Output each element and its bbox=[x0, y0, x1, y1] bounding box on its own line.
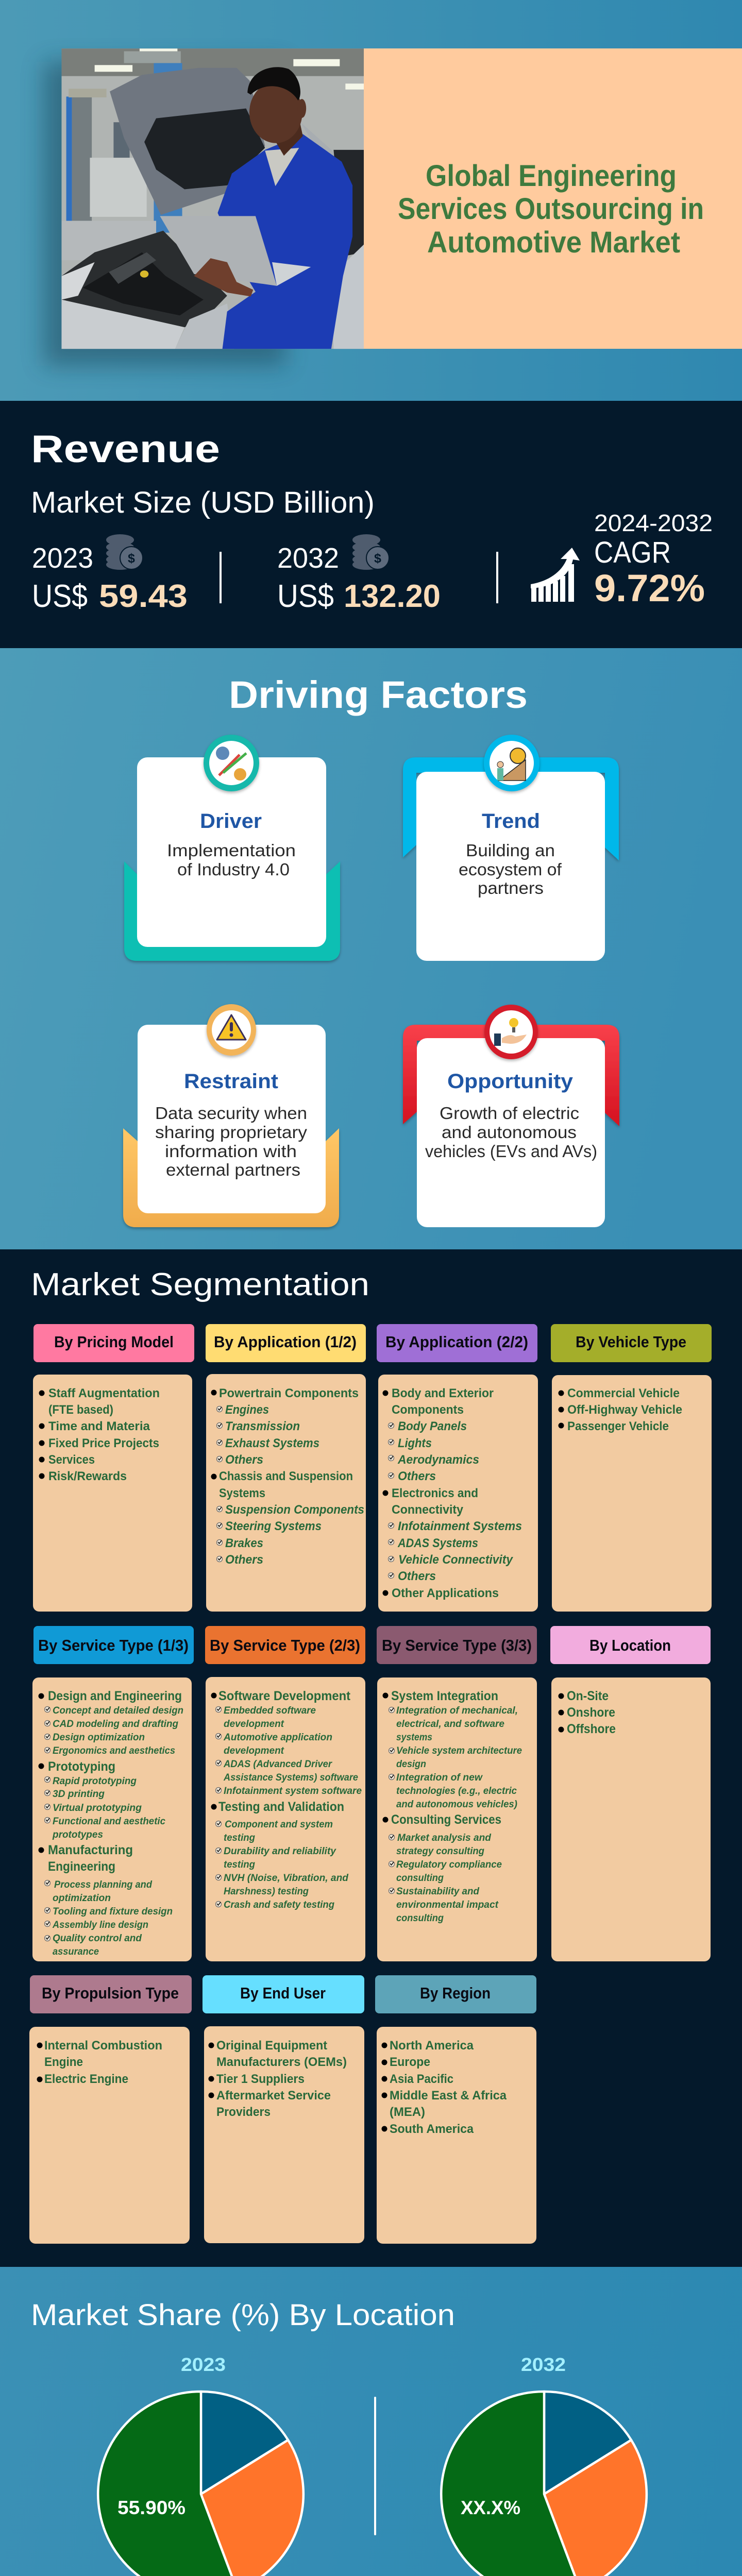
region list: South America bbox=[390, 2122, 474, 2136]
pricing model list bbox=[39, 1386, 160, 1483]
panel: by vehicle type bbox=[551, 1324, 712, 1612]
trend text bbox=[459, 841, 562, 897]
revenue 2023: 59.43 bbox=[99, 579, 188, 614]
service type 1 list: assurance bbox=[53, 1946, 99, 1957]
application 2 list: Electronics and bbox=[392, 1486, 478, 1500]
pie chart: location 2032 bbox=[441, 2392, 647, 2576]
application 1 list: Transmission bbox=[225, 1419, 300, 1433]
icon: coins 2023: $ bbox=[128, 551, 135, 566]
application 1 list: Systems bbox=[219, 1486, 265, 1500]
icon: coins 2032: $ bbox=[374, 551, 381, 566]
vehicle type list: Off-Highway Vehicle bbox=[567, 1403, 682, 1417]
service type 2 list: Software Development bbox=[218, 1689, 351, 1703]
panel: by service type 1/3: By Service Type (1/3) bbox=[38, 1636, 189, 1654]
title text: Automotive Market bbox=[427, 226, 680, 259]
trend heading: Trend bbox=[482, 810, 540, 833]
service type 2 list bbox=[211, 1689, 362, 1910]
pie chart: location 2023 bbox=[98, 2392, 303, 2576]
service type 3 list: Integration of mechanical, bbox=[396, 1705, 518, 1716]
panel: by propulsion type: By Propulsion Type bbox=[42, 1984, 179, 2002]
propulsion list: Internal Combustion bbox=[44, 2039, 162, 2053]
service type 2 list: testing bbox=[224, 1833, 255, 1843]
hero photo: mechanic with laptop bbox=[61, 48, 364, 349]
service type 1 list: 3D printing bbox=[53, 1789, 105, 1800]
restraint text bbox=[155, 1104, 308, 1179]
region list bbox=[381, 2039, 507, 2136]
application 2 list: Components bbox=[392, 1403, 464, 1417]
service type 2 list: Component and system bbox=[225, 1819, 333, 1830]
divider bbox=[220, 552, 222, 603]
revenue 2032: US$ bbox=[277, 579, 334, 614]
panel: by service type 2/3 bbox=[205, 1626, 365, 1961]
market segmentation heading: Market Segmentation bbox=[31, 1267, 369, 1302]
panel: by service type 3/3 bbox=[377, 1626, 537, 1961]
region list: Asia Pacific bbox=[390, 2072, 453, 2086]
service type 2 list: testing bbox=[224, 1859, 255, 1870]
end user list: Providers bbox=[216, 2105, 271, 2119]
application 2 list: Others bbox=[398, 1569, 436, 1583]
panel: by service type 3/3: By Service Type (3/3) bbox=[382, 1636, 532, 1654]
end user list: Manufacturers (OEMs) bbox=[216, 2055, 347, 2069]
restraint text: Data security when bbox=[155, 1104, 307, 1123]
service type 3 list: strategy consulting bbox=[396, 1846, 484, 1857]
panel: by pricing model: By Pricing Model bbox=[54, 1333, 174, 1351]
icon: warning triangle bbox=[207, 1004, 256, 1056]
icon: driver arrows and gears bbox=[204, 735, 259, 791]
pie chart: location 2023: 55.90% bbox=[117, 2497, 185, 2518]
service type 3 list: Vehicle system architecture bbox=[396, 1745, 522, 1756]
pie chart: location 2032: XX.X% bbox=[461, 2497, 520, 2518]
service type 2 list: Embedded software bbox=[224, 1705, 316, 1716]
application 2 list: Aerodynamics bbox=[397, 1453, 479, 1467]
vehicle type list: Commercial Vehicle bbox=[567, 1386, 680, 1400]
pricing model list: Staff Augmentation bbox=[48, 1386, 160, 1400]
service type 2 list: development bbox=[224, 1745, 284, 1756]
CAGR block: 9.72% bbox=[594, 567, 705, 609]
revenue 2023: 2023 bbox=[32, 542, 93, 574]
application 2 list: Infotainment Systems bbox=[398, 1519, 522, 1533]
location list: Onshore bbox=[567, 1705, 615, 1720]
pricing model list: Risk/Rewards bbox=[48, 1469, 127, 1483]
panel: by propulsion type bbox=[29, 1975, 192, 2244]
year label 2023: 2023 bbox=[181, 2354, 226, 2375]
icon: trend climber and gear bbox=[484, 735, 539, 791]
panel: by region: By Region bbox=[420, 1984, 491, 2002]
end user list: Tier 1 Suppliers bbox=[216, 2072, 305, 2086]
service type 1 list: Rapid prototyping bbox=[53, 1776, 137, 1787]
restraint text: sharing proprietary bbox=[155, 1123, 308, 1142]
service type 3 list: consulting bbox=[396, 1913, 444, 1924]
service type 1 list: Virtual prototyping bbox=[53, 1803, 142, 1814]
market share by location heading: Market Share (%) By Location bbox=[31, 2298, 455, 2332]
application 1 list bbox=[211, 1386, 364, 1567]
panel: driver bbox=[124, 735, 340, 961]
trend text: Building an bbox=[466, 841, 555, 860]
panel: opportunity bbox=[403, 1005, 619, 1227]
pricing model list: Services bbox=[48, 1453, 95, 1467]
panel: by application 2/2 bbox=[377, 1324, 538, 1612]
service type 1 list bbox=[38, 1689, 183, 1957]
revenue 2023 bbox=[32, 542, 188, 614]
divider bbox=[374, 2397, 376, 2535]
service type 2 list: Crash and safety testing bbox=[224, 1900, 334, 1910]
application 1 list: Suspension Components bbox=[225, 1503, 364, 1517]
location list: Offshore bbox=[567, 1722, 616, 1736]
service type 1 list: Concept and detailed design bbox=[53, 1705, 183, 1716]
service type 1 list: Quality control and bbox=[53, 1933, 142, 1944]
service type 1 list: Design and Engineering bbox=[48, 1689, 182, 1703]
application 1 list: Brakes bbox=[225, 1536, 263, 1550]
panel: by end user: By End User bbox=[240, 1984, 326, 2002]
panel: by pricing model bbox=[33, 1324, 194, 1612]
opportunity text: Growth of electric bbox=[440, 1104, 579, 1123]
service type 3 list: Consulting Services bbox=[391, 1812, 501, 1827]
title text: Global Engineering bbox=[426, 159, 677, 193]
restraint text: information with bbox=[165, 1142, 297, 1161]
service type 1 list: CAD modeling and drafting bbox=[53, 1719, 178, 1730]
service type 2 list: ADAS (Advanced Driver bbox=[223, 1759, 333, 1770]
CAGR block: CAGR bbox=[594, 536, 671, 569]
service type 3 list: System Integration bbox=[391, 1689, 498, 1703]
year label 2032: 2032 bbox=[521, 2354, 566, 2375]
service type 2 list: Assistance Systems) software bbox=[223, 1772, 358, 1783]
propulsion list: Engine bbox=[44, 2055, 83, 2069]
service type 3 list: Sustainability and bbox=[396, 1886, 479, 1897]
pricing model list: Time and Materia bbox=[48, 1419, 150, 1433]
panel: by service type 2/3: By Service Type (2/3) bbox=[210, 1636, 360, 1654]
location list bbox=[559, 1689, 616, 1736]
service type 3 list: Integration of new bbox=[396, 1772, 483, 1783]
service type 1 list: prototypes bbox=[52, 1829, 103, 1840]
title text: Services Outsourcing in bbox=[398, 192, 704, 226]
service type 1 list: Ergonomics and aesthetics bbox=[53, 1745, 175, 1756]
service type 2 list: development bbox=[224, 1719, 284, 1730]
revenue 2032: 132.20 bbox=[344, 579, 441, 614]
divider bbox=[496, 552, 498, 603]
section background: market share bbox=[0, 2267, 742, 2576]
title panel bbox=[364, 48, 742, 349]
icon: opportunity hand and bulb bbox=[484, 1005, 538, 1059]
propulsion list: Electric Engine bbox=[44, 2072, 128, 2086]
location list: On-Site bbox=[567, 1689, 609, 1703]
restraint heading: Restraint bbox=[184, 1070, 278, 1093]
revenue 2032: 2032 bbox=[277, 542, 339, 574]
end user list: Aftermarket Service bbox=[216, 2089, 331, 2103]
panel: by application 1/2 bbox=[206, 1324, 366, 1612]
title text bbox=[398, 159, 704, 259]
application 1 list: Engines bbox=[225, 1403, 269, 1417]
icon: growth chart arrow bbox=[531, 548, 580, 602]
driver text: of Industry 4.0 bbox=[177, 860, 290, 879]
revenue 2023: US$ bbox=[32, 579, 88, 614]
section background: market segmentation bbox=[0, 1249, 742, 2267]
service type 1 list: Manufacturing bbox=[48, 1843, 133, 1857]
opportunity heading: Opportunity bbox=[447, 1070, 574, 1093]
driver text: Implementation bbox=[167, 841, 296, 860]
icon: coins 2032 bbox=[352, 534, 389, 570]
panel: restraint bbox=[123, 1004, 339, 1227]
service type 2 list: Infotainment system software bbox=[224, 1786, 362, 1797]
application 1 list: Chassis and Suspension bbox=[219, 1469, 353, 1483]
service type 1 list: Engineering bbox=[48, 1859, 115, 1874]
application 1 list: Others bbox=[225, 1453, 263, 1467]
propulsion list bbox=[37, 2039, 162, 2086]
application 2 list bbox=[382, 1386, 522, 1600]
restraint text: external partners bbox=[166, 1160, 300, 1179]
service type 1 list: Process planning and bbox=[54, 1879, 152, 1890]
panel: trend bbox=[403, 735, 619, 961]
region list: Europe bbox=[390, 2055, 430, 2069]
service type 3 list: and autonomous vehicles) bbox=[396, 1799, 517, 1810]
opportunity text: and autonomous bbox=[442, 1123, 577, 1142]
pricing model list: (FTE based) bbox=[48, 1403, 113, 1417]
service type 3 list: design bbox=[396, 1759, 426, 1770]
application 1 list: Exhaust Systems bbox=[225, 1436, 319, 1450]
region list: North America bbox=[390, 2039, 474, 2053]
panel: by end user bbox=[203, 1975, 364, 2243]
service type 3 list: electrical, and software bbox=[396, 1719, 504, 1730]
service type 3 list bbox=[382, 1689, 522, 1924]
service type 3 list: Market analysis and bbox=[397, 1833, 491, 1843]
panel: by application 1/2: By Application (1/2) bbox=[214, 1333, 357, 1351]
service type 1 list: Prototyping bbox=[48, 1759, 115, 1774]
section background: revenue bbox=[0, 401, 742, 648]
revenue heading: Revenue bbox=[31, 427, 220, 470]
application 2 list: ADAS Systems bbox=[397, 1536, 478, 1550]
CAGR block bbox=[594, 510, 713, 609]
trend text: ecosystem of bbox=[459, 860, 562, 879]
service type 3 list: Regulatory compliance bbox=[396, 1859, 502, 1870]
application 2 list: Others bbox=[398, 1469, 436, 1483]
service type 1 list: optimization bbox=[53, 1893, 111, 1904]
application 2 list: Connectivity bbox=[392, 1503, 464, 1517]
panel: by vehicle type: By Vehicle Type bbox=[576, 1333, 686, 1351]
application 1 list: Others bbox=[225, 1553, 263, 1567]
application 1 list: Powertrain Components bbox=[219, 1386, 359, 1400]
CAGR block: 2024-2032 bbox=[594, 510, 713, 536]
revenue 2032 bbox=[277, 542, 441, 614]
panel: by location bbox=[550, 1626, 711, 1961]
region list: Middle East & Africa bbox=[390, 2089, 507, 2103]
end user list: Original Equipment bbox=[216, 2039, 327, 2053]
driver text bbox=[167, 841, 296, 879]
application 2 list: Body and Exterior bbox=[392, 1386, 494, 1400]
driver heading: Driver bbox=[200, 810, 262, 833]
application 1 list: Steering Systems bbox=[225, 1519, 322, 1533]
service type 3 list: environmental impact bbox=[396, 1900, 499, 1910]
application 2 list: Body Panels bbox=[398, 1419, 467, 1433]
panel: by region bbox=[375, 1975, 536, 2244]
application 2 list: Lights bbox=[398, 1436, 432, 1450]
icon: coins 2023 bbox=[106, 534, 143, 570]
opportunity text: vehicles (EVs and AVs) bbox=[425, 1142, 597, 1161]
region list: (MEA) bbox=[390, 2105, 425, 2119]
opportunity text bbox=[425, 1104, 597, 1161]
service type 3 list: systems bbox=[396, 1732, 432, 1743]
service type 1 list: Tooling and fixture design bbox=[53, 1906, 173, 1917]
end user list bbox=[208, 2039, 347, 2119]
service type 2 list: Automotive application bbox=[223, 1732, 332, 1743]
service type 1 list: Functional and aesthetic bbox=[53, 1816, 165, 1827]
service type 1 list: Design optimization bbox=[53, 1732, 145, 1743]
photo shadow bbox=[44, 62, 286, 366]
vehicle type list bbox=[559, 1386, 682, 1433]
service type 1 list: Assembly line design bbox=[52, 1920, 148, 1930]
service type 2 list: Durability and reliability bbox=[224, 1846, 336, 1857]
section background: driving factors bbox=[0, 648, 742, 1249]
service type 2 list: NVH (Noise, Vibration, and bbox=[224, 1873, 348, 1884]
service type 3 list: consulting bbox=[396, 1873, 444, 1884]
panel: by application 2/2: By Application (2/2) bbox=[385, 1333, 528, 1351]
pricing model list: Fixed Price Projects bbox=[48, 1436, 159, 1450]
application 2 list: Other Applications bbox=[392, 1586, 499, 1600]
driving factors heading: Driving Factors bbox=[229, 673, 528, 716]
application 2 list: Vehicle Connectivity bbox=[398, 1553, 514, 1567]
market size subheading: Market Size (USD Billion) bbox=[31, 486, 375, 519]
section background: header bbox=[0, 0, 742, 401]
service type 2 list: Testing and Validation bbox=[218, 1800, 344, 1814]
vehicle type list: Passenger Vehicle bbox=[567, 1419, 669, 1433]
panel: by location: By Location bbox=[589, 1636, 671, 1654]
trend text: partners bbox=[478, 878, 544, 897]
panel: by service type 1/3 bbox=[32, 1626, 194, 1961]
service type 2 list: Harshness) testing bbox=[224, 1886, 309, 1897]
service type 3 list: technologies (e.g., electric bbox=[396, 1786, 517, 1797]
